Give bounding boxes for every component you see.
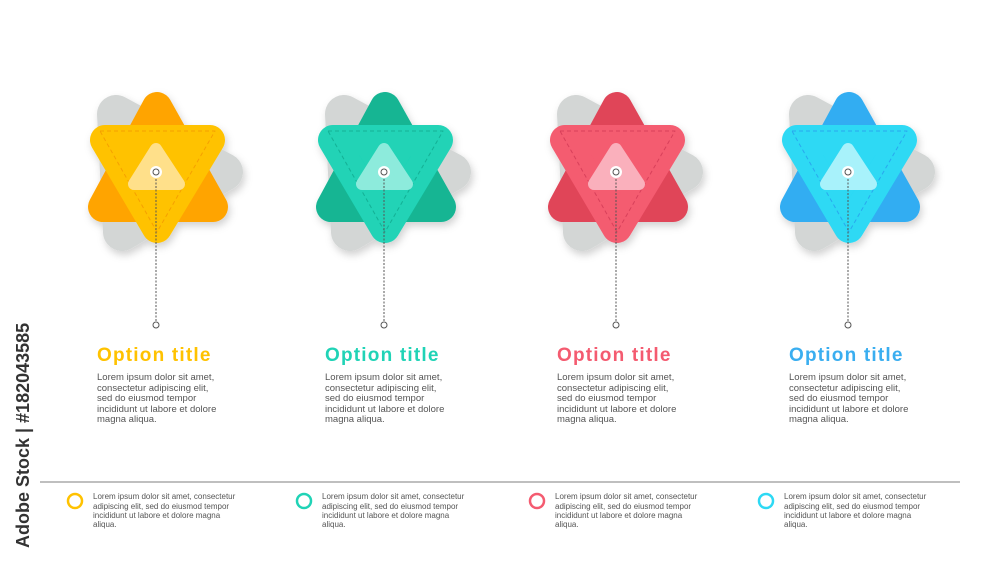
group 2: teal bbox=[325, 107, 452, 425]
footer item 4: adipiscing elit, sed do eiusmod tempor bbox=[784, 502, 920, 511]
icon: yellow layered triangles bbox=[100, 107, 224, 232]
footer item 1 bbox=[68, 492, 236, 529]
body text: incididunt ut labore et dolore bbox=[557, 404, 676, 415]
body text: Lorem ipsum dolor sit amet, bbox=[325, 372, 442, 383]
footer item 1: adipiscing elit, sed do eiusmod tempor bbox=[93, 502, 229, 511]
footer item 1: incididunt ut labore et dolore magna bbox=[93, 511, 221, 520]
icon: red layered triangles bbox=[560, 107, 684, 232]
heading: Option title bbox=[557, 345, 672, 366]
body text: consectetur adipiscing elit, bbox=[97, 383, 208, 394]
body text: incididunt ut labore et dolore bbox=[789, 404, 908, 415]
heading: Option title bbox=[97, 345, 212, 366]
body text: Lorem ipsum dolor sit amet, bbox=[97, 372, 214, 383]
connector dotted line bbox=[610, 166, 622, 328]
footer item 2: adipiscing elit, sed do eiusmod tempor bbox=[322, 502, 458, 511]
body text: consectetur adipiscing elit, bbox=[325, 383, 436, 394]
footer item 1: aliqua. bbox=[93, 520, 117, 529]
footer item 3 bbox=[530, 492, 698, 529]
body text: sed do eiusmod tempor bbox=[325, 393, 424, 404]
body text: incididunt ut labore et dolore bbox=[97, 404, 216, 415]
watermark vertical text: Adobe Stock | #182043585 bbox=[13, 323, 33, 548]
footer item 4 bbox=[759, 492, 927, 529]
body text: Lorem ipsum dolor sit amet, bbox=[789, 372, 906, 383]
footer item 4: Lorem ipsum dolor sit amet, consectetur bbox=[784, 492, 927, 501]
group 4: blue bbox=[789, 107, 916, 425]
body text: magna aliqua. bbox=[97, 414, 157, 425]
group 1: yellow bbox=[97, 107, 224, 425]
heading: Option title bbox=[789, 345, 904, 366]
footer item 2 bbox=[297, 492, 465, 529]
body text: sed do eiusmod tempor bbox=[97, 393, 196, 404]
footer item 2: Lorem ipsum dolor sit amet, consectetur bbox=[322, 492, 465, 501]
body text: magna aliqua. bbox=[557, 414, 617, 425]
heading: Option title bbox=[325, 345, 440, 366]
group 3: red bbox=[557, 107, 684, 425]
footer item 3: adipiscing elit, sed do eiusmod tempor bbox=[555, 502, 691, 511]
icon: teal layered triangles bbox=[328, 107, 452, 232]
connector dotted line bbox=[842, 166, 854, 328]
footer item 2: incididunt ut labore et dolore magna bbox=[322, 511, 450, 520]
body text: Lorem ipsum dolor sit amet, bbox=[557, 372, 674, 383]
connector dotted line bbox=[150, 166, 162, 328]
icon: blue layered triangles bbox=[792, 107, 916, 232]
footer item 3: Lorem ipsum dolor sit amet, consectetur bbox=[555, 492, 698, 501]
body text: magna aliqua. bbox=[325, 414, 385, 425]
footer item 3: incididunt ut labore et dolore magna bbox=[555, 511, 683, 520]
body text: consectetur adipiscing elit, bbox=[789, 383, 900, 394]
body text: incididunt ut labore et dolore bbox=[325, 404, 444, 415]
body text: sed do eiusmod tempor bbox=[557, 393, 656, 404]
footer item 4: aliqua. bbox=[784, 520, 808, 529]
footer item 2: aliqua. bbox=[322, 520, 346, 529]
body text: magna aliqua. bbox=[789, 414, 849, 425]
body text: consectetur adipiscing elit, bbox=[557, 383, 668, 394]
body text: sed do eiusmod tempor bbox=[789, 393, 888, 404]
connector dotted line bbox=[378, 166, 390, 328]
footer item 3: aliqua. bbox=[555, 520, 579, 529]
footer item 1: Lorem ipsum dolor sit amet, consectetur bbox=[93, 492, 236, 501]
footer item 4: incididunt ut labore et dolore magna bbox=[784, 511, 912, 520]
